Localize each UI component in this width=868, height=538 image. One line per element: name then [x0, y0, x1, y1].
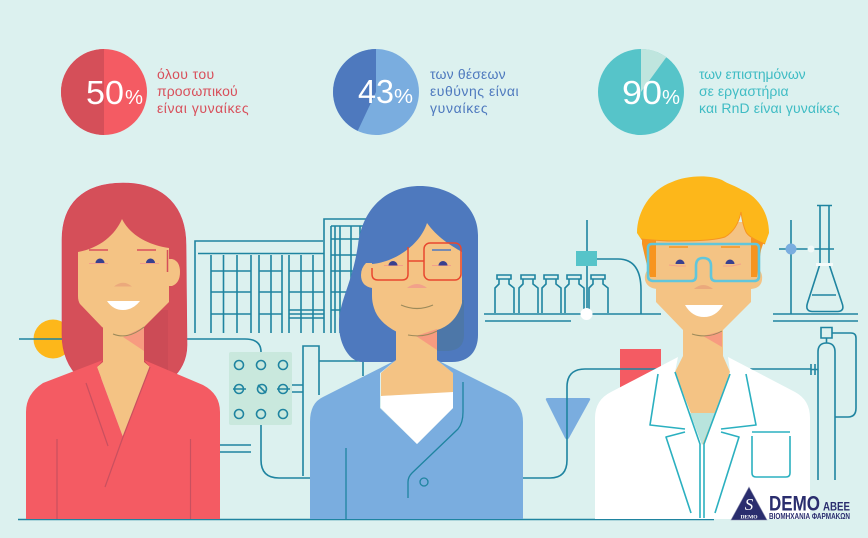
- pie chart: 90%: %: [662, 87, 680, 109]
- character: scientist with yellow hair, goggles and lab coat: [595, 176, 810, 519]
- logo wordmark: DEMO: [769, 492, 820, 516]
- white shirt: [381, 392, 453, 444]
- neck: [675, 320, 730, 445]
- red jacket: [26, 360, 220, 519]
- text: scientists: των επιστημόνων: [699, 66, 806, 82]
- icon: retort stand with flask: [773, 206, 858, 321]
- text: scientists: σε εργαστήρια: [699, 83, 789, 99]
- smile: [401, 305, 433, 308]
- logo wordmark: ABEE: [823, 502, 850, 514]
- pipe from funnel to lab coat: [523, 369, 811, 478]
- logo wordmark: [769, 492, 850, 521]
- stat: 50% of all staff: [61, 49, 249, 135]
- nose: [694, 285, 713, 289]
- icon: gas cylinder with tube: [811, 328, 856, 480]
- text: management: γυναίκες: [430, 100, 488, 116]
- text: scientists: [699, 66, 840, 116]
- logo wordmark: ΒΙΟΜΗΧΑΝΙΑ ΦΑΡΜΑΚΩΝ: [769, 512, 850, 521]
- hair: [339, 186, 478, 362]
- smile: [107, 301, 140, 310]
- face: [372, 223, 462, 337]
- logo: DEMO ABEE: [731, 487, 850, 521]
- safety goggles: [648, 244, 759, 281]
- ground line: [18, 518, 714, 520]
- shirt: [690, 413, 715, 445]
- logo triangle: [731, 487, 767, 520]
- pie chart: 50%: %: [125, 87, 143, 109]
- logo triangle: S: [745, 495, 754, 514]
- text: management: ευθύνης είναι: [430, 83, 519, 99]
- ear: [361, 263, 372, 288]
- text: management: των θέσεων: [430, 66, 506, 82]
- nose: [114, 283, 132, 286]
- stat: 90% of lab and RnD scientists: [598, 49, 840, 135]
- pie chart: 43%: [333, 49, 419, 135]
- pie chart: 90%: [598, 49, 684, 135]
- background line art: vials on shelf: [484, 220, 661, 321]
- button: [420, 478, 428, 486]
- panel: green valve board with pipes: [19, 339, 310, 478]
- neck: [97, 320, 150, 437]
- pie chart: 43%: %: [394, 86, 413, 108]
- smile: [685, 305, 723, 317]
- sideburns: [642, 238, 765, 277]
- pie chart: 43%: 43: [358, 73, 394, 110]
- icon: yellow sun circle: [34, 320, 72, 358]
- text: management: [430, 66, 519, 116]
- ears: [645, 268, 762, 289]
- pocket: [752, 432, 790, 477]
- eyes: [384, 250, 451, 266]
- blond hair: [637, 176, 769, 244]
- glasses: [372, 243, 461, 280]
- coat lines: [650, 372, 756, 518]
- neck: [381, 325, 453, 396]
- pie chart: 90%: 90: [622, 74, 662, 111]
- hair: [62, 183, 187, 378]
- pie chart: 50%: [61, 49, 147, 135]
- background line art: factory buildings: [195, 219, 372, 476]
- ear: [168, 259, 180, 286]
- character: woman with blue hair and glasses: [310, 186, 523, 519]
- stat: 43% of management positions: [333, 49, 519, 135]
- brows and eyes: [669, 247, 741, 266]
- text: scientists: και RnD είναι γυναίκες: [699, 100, 840, 116]
- icon: red square: [620, 349, 661, 391]
- text: staff: είναι γυναίκες: [157, 100, 249, 116]
- character: woman with red hair: [26, 183, 220, 519]
- eyes and brows: [89, 250, 159, 264]
- face: [650, 222, 755, 336]
- text: staff: [157, 66, 249, 116]
- text: staff: όλου του: [157, 66, 215, 82]
- logo triangle: DEMO: [740, 514, 758, 520]
- blue coat: [310, 360, 523, 519]
- icon: funnel: [546, 398, 590, 440]
- face: [78, 219, 169, 334]
- pie chart: 50%: 50: [86, 74, 124, 111]
- lab coat: [595, 357, 810, 519]
- text: staff: προσωπικού: [157, 83, 238, 99]
- nose: [407, 284, 427, 288]
